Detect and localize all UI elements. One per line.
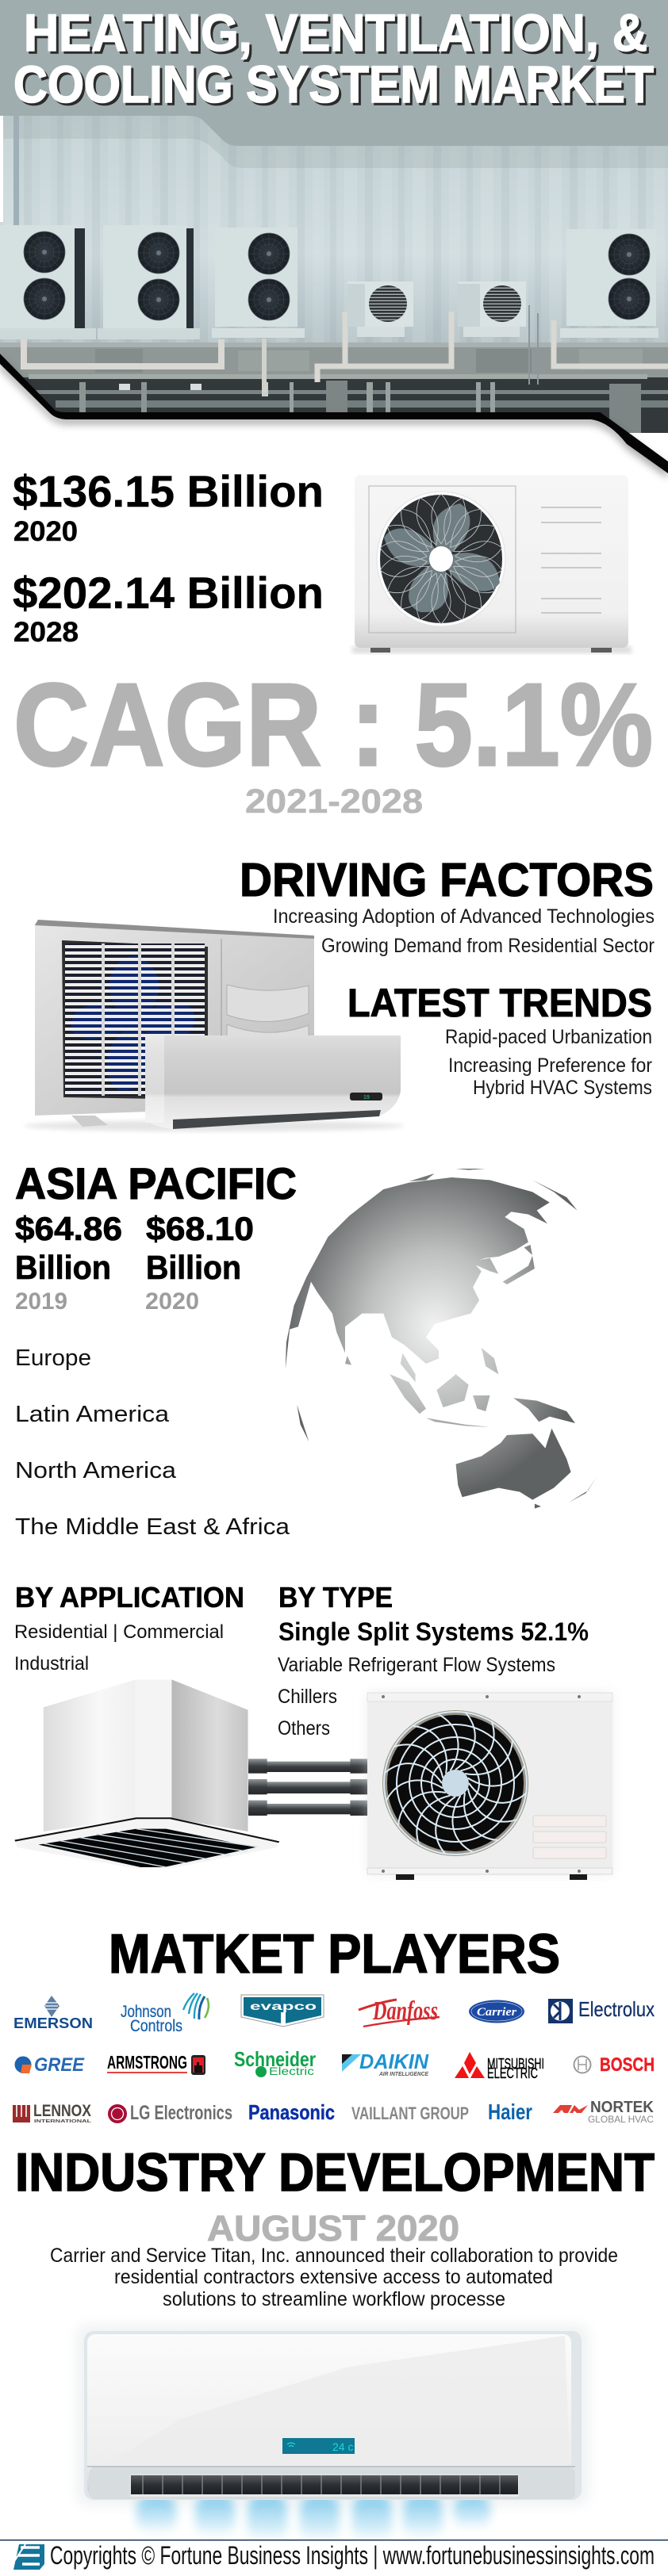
logo: Nortek [553,2099,655,2125]
market size figures: $136.15 Billion [13,466,324,516]
region list [15,1345,290,1540]
small AC unit 2 [458,281,526,327]
logo: Carrier: Carrier [477,2006,516,2019]
by type: Others [278,1717,330,1740]
driving factors: DRIVING FACTORS [240,854,654,906]
logo: Danfoss: Danfoss [372,1996,438,2026]
region list: Latin America [15,1402,170,1427]
by application: Residential | Commercial [14,1621,224,1643]
industry development details: Carrier and Service Titan, Inc. announced their collaboration to provide [50,2245,618,2267]
CAGR headline: 2021-2028 [245,783,423,821]
black angled photo border [0,354,668,473]
logo: Daikin: DAIKIN [359,2050,429,2073]
footer logo [13,2544,44,2570]
logo: Electrolux: Electrolux [578,1997,655,2021]
logo: Mitsubishi Electric [455,2052,544,2081]
logo: Armstrong: ARMSTRONG [107,2052,187,2073]
Asia Pacific stats: $64.86 [15,1210,122,1247]
market size figures [13,466,324,648]
industry development details: solutions to streamline workflow processe [163,2288,505,2310]
heading: market players: MATKET PLAYERS [109,1923,560,1985]
logo: Nortek: GLOBAL HVAC [588,2114,654,2125]
market size figures: 2028 [13,617,79,648]
latest trends: LATEST TRENDS [347,981,652,1025]
logo: Lennox [13,2102,91,2124]
latest trends: Hybrid HVAC Systems [473,1077,652,1099]
icon: outdoor AC unit with fan [352,475,632,653]
logo: Gree: GREE [34,2054,85,2076]
logo: Lennox: INTERNATIONAL [34,2119,91,2124]
Asia Pacific stats: ASIA PACIFIC [15,1158,297,1208]
logo: Emerson: EMERSON [13,2015,93,2031]
pipes [24,339,221,366]
latest trends [347,981,652,1099]
Asia Pacific stats: 2020 [145,1288,199,1315]
logo: Johnson Controls [121,1993,209,2035]
industry development details: residential contractors extensive access to automated [114,2266,553,2288]
region list: North America [15,1458,177,1483]
Asia Pacific stats: 2019 [15,1288,67,1315]
driving factors [240,854,655,957]
Asia Pacific stats [15,1158,297,1315]
logo: Evapco [241,1995,324,2027]
AC unit 1 [0,225,85,328]
logo: Gree [14,2054,85,2076]
by application [14,1581,244,1675]
title [13,3,654,113]
logo: Nortek: NORTEK [590,2099,655,2116]
small AC unit 1 [347,281,413,327]
logo: Carrier [469,2000,524,2023]
logo: Johnson Controls: Johnson [121,2003,171,2021]
region list: Europe [15,1345,91,1371]
by type [278,1581,589,1740]
concrete ledge [0,347,668,377]
logo: Schneider Electric: Electric [269,2065,314,2077]
AC unit 2 [103,225,194,328]
latest trends: Increasing Preference for [448,1055,652,1077]
logo: LG Electronics: LG Electronics [130,2102,232,2124]
logo: Bosch: BOSCH [600,2054,655,2076]
by type: BY TYPE [278,1581,393,1613]
logo: Bosch [574,2054,655,2076]
logo: Danfoss [359,1996,440,2027]
refrigerant pipes [248,1759,368,1816]
translucent band [0,116,668,168]
illustration: outdoor unit with round fan [367,1693,612,1880]
market size figures: 2020 [13,516,78,547]
logo: Haier: Haier [488,2099,532,2124]
globe [286,1169,597,1509]
logo: Schneider Electric: Schneider [234,2047,316,2071]
logo: Evapco: evapco [250,2000,317,2012]
Asia Pacific stats: $68.10 [146,1210,254,1247]
logo: Johnson Controls: Controls [130,2017,182,2035]
logo: Mitsubishi Electric: MITSUBISHI [487,2056,544,2072]
logo: Daikin: AIR INTELLIGENCE [378,2072,428,2077]
industry development details [50,2208,618,2310]
AC unit 3 [215,228,298,327]
industry development details: AUGUST 2020 [207,2208,459,2249]
logo: Lennox: LENNOX [33,2102,91,2120]
logo: LG Electronics [108,2102,232,2124]
logo: Mitsubishi Electric: ELECTRIC [487,2065,538,2081]
logo: Schneider Electric [234,2047,316,2077]
Asia Pacific stats: Billion [146,1249,241,1286]
by application: Industrial [14,1653,89,1675]
region list: The Middle East & Africa [15,1514,290,1540]
Asia Pacific stats: Billion [15,1249,111,1286]
by type: Variable Refrigerant Flow Systems [278,1654,555,1676]
logo: Vaillant Group: VAILLANT GROUP [351,2103,469,2123]
logo: Electrolux [548,1997,655,2023]
market size figures: $202.14 Billion [13,568,324,618]
illustration: wall-mounted AC with blue airflow: 24 c [332,2440,353,2453]
logo: Emerson [13,1996,93,2031]
by application: BY APPLICATION [15,1581,244,1613]
by type: Chillers [278,1686,337,1708]
logo: Daikin [342,2050,429,2077]
platforms [0,328,96,339]
illustration: silver outdoor and indoor AC [24,920,405,1131]
AC unit 6 [566,229,656,326]
header band [0,0,668,146]
logo: Panasonic: Panasonic [248,2100,335,2124]
illustration: wall-mounted AC with blue airflow [0,2325,668,2548]
illustration: ceiling cassette unit [15,1679,279,1869]
by type: Single Split Systems 52.1% [278,1617,589,1646]
illustration: silver outdoor and indoor AC: 19 [363,1095,370,1100]
latest trends: Rapid-paced Urbanization [445,1026,652,1048]
hero photo: rooftop HVAC units [0,116,668,433]
